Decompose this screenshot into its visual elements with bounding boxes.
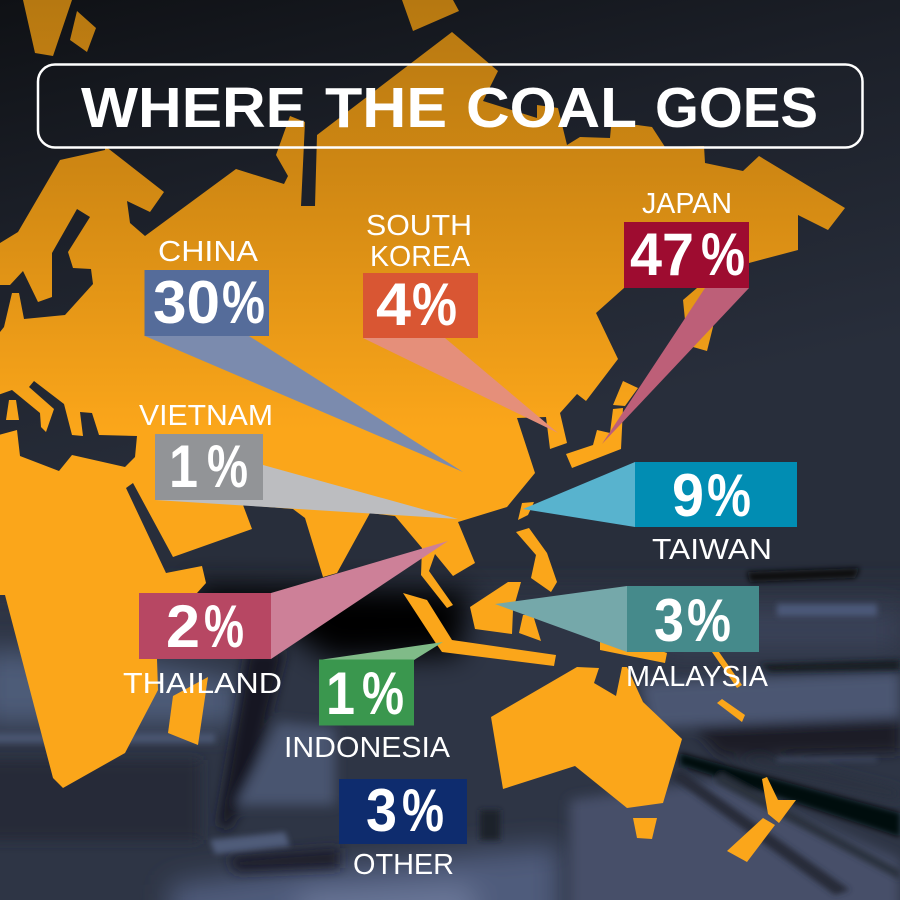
callout: Indonesia 1% bbox=[284, 642, 451, 764]
map: New Zealand bbox=[727, 777, 796, 862]
title: THE bbox=[325, 76, 447, 140]
callout: Indonesia 1%: % bbox=[362, 660, 404, 727]
map: Taiwan and Philippines bbox=[516, 502, 557, 592]
callout: China 30%: % bbox=[222, 269, 265, 336]
callout: Indonesia 1%: 1 bbox=[326, 660, 355, 727]
map: Australia and Tasmania bbox=[491, 667, 682, 839]
callout: Malaysia 3% bbox=[495, 586, 769, 693]
callout: Vietnam 1%: 1 bbox=[169, 433, 198, 500]
callout: Malaysia 3%: 3 bbox=[654, 587, 684, 654]
callout: Thailand 2%: % bbox=[204, 593, 244, 660]
callout: Thailand 2% bbox=[123, 541, 448, 700]
callout: Japan 47%: JAPAN bbox=[642, 188, 732, 220]
callout: Thailand 2%: 2 bbox=[166, 593, 200, 660]
callout: Other 3%: OTHER bbox=[353, 849, 454, 881]
callout: Vietnam 1%: VIETNAM bbox=[139, 400, 273, 432]
map: Eurasia and Africa bbox=[0, 32, 845, 788]
callout: South Korea 4%: KOREA bbox=[370, 241, 471, 273]
title bbox=[38, 64, 862, 148]
callout: Japan 47%: % bbox=[701, 221, 745, 288]
callout: China 30%: 30 bbox=[153, 269, 220, 336]
callout: Japan 47%: 47 bbox=[630, 221, 694, 288]
callout: South Korea 4%: SOUTH bbox=[366, 210, 472, 242]
callout: Taiwan 9%: 9 bbox=[672, 462, 704, 529]
callout: Taiwan 9%: TAIWAN bbox=[652, 534, 772, 566]
callout: Thailand 2%: THAILAND bbox=[123, 668, 282, 700]
callout: South Korea 4%: % bbox=[412, 271, 457, 338]
callout: Other 3%: 3 bbox=[366, 777, 397, 844]
callout: South Korea 4% bbox=[363, 210, 558, 433]
map: New Guinea and Pacific islands bbox=[600, 640, 745, 722]
title: COAL bbox=[466, 76, 637, 140]
map: Indonesia, Borneo, Sulawesi bbox=[403, 582, 556, 666]
callout: Japan 47% bbox=[602, 188, 749, 444]
callout: Other 3%: % bbox=[402, 777, 444, 844]
callout: South Korea 4%: 4 bbox=[376, 271, 412, 338]
background: blurred coal port photograph bbox=[0, 568, 900, 900]
callout: Vietnam 1%: % bbox=[207, 433, 248, 500]
map: Madagascar bbox=[168, 677, 208, 745]
callout: Malaysia 3%: MALAYSIA bbox=[626, 661, 769, 693]
map: Japan bbox=[566, 288, 715, 468]
callout: Malaysia 3%: % bbox=[687, 587, 731, 654]
callout: China 30%: CHINA bbox=[158, 236, 259, 268]
callout: Vietnam 1% bbox=[139, 400, 458, 519]
callout: China 30% bbox=[144, 236, 463, 472]
callout: Taiwan 9% bbox=[523, 462, 797, 566]
callout: Indonesia 1%: INDONESIA bbox=[284, 732, 451, 764]
title: GOES bbox=[655, 76, 818, 140]
callout: Taiwan 9%: % bbox=[707, 462, 751, 529]
map: northern islands bbox=[23, 0, 459, 56]
title: WHERE bbox=[81, 76, 306, 140]
callout: Other 3% bbox=[339, 777, 467, 881]
